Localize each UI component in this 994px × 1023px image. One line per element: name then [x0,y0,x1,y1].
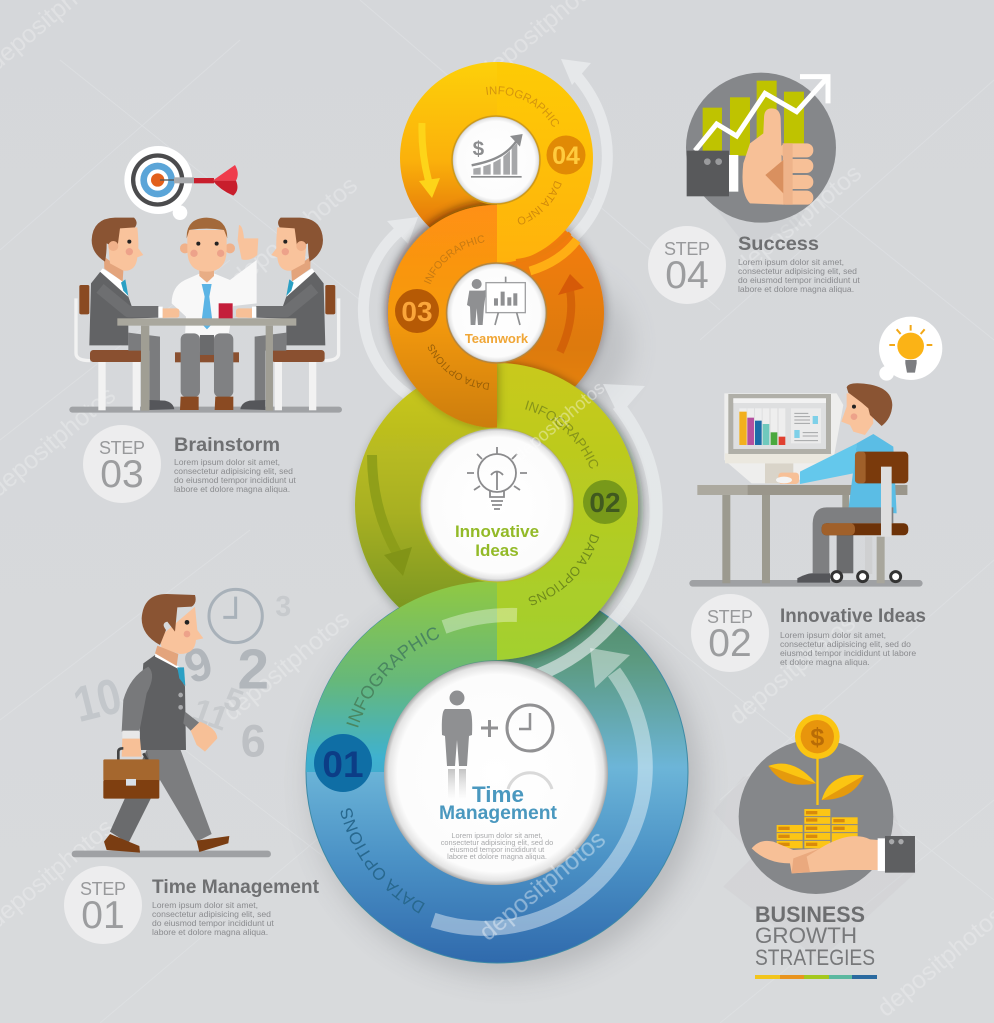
disc: step 02 ring [355,364,638,646]
ribbon: step 02 right half [497,363,638,660]
ring labels: INFOGRAPHIC [486,86,559,127]
icon: hand growing money plant [713,714,917,960]
watermark over rings: depositphotos [474,825,611,947]
ground shadow [312,588,700,976]
white circle: step 04 [452,116,540,204]
walking man [104,594,229,853]
monitor chart [739,408,821,445]
ribbon: step 04 right half [497,62,593,263]
heading: innovative ideas: Innovative Ideas [780,606,926,627]
icon: clock and floating numbers: 11 [187,692,233,739]
scene: brainstorm meeting [69,146,342,413]
heading: time management: Time [472,782,524,807]
text: innovative ideas body: consectetur adipisicing elit, sed do [780,639,911,649]
ring labels [340,86,600,914]
step badge 02: 02 [708,622,752,665]
disc: step 03 ring [388,205,604,421]
text: circle lorem: eiusmod tempor incididunt ut [450,845,544,854]
scene: thumbs up chart [686,73,836,247]
step badge 01: 01 [81,894,125,937]
coin [795,714,840,759]
ring labels: INFOGRAPHIC [424,235,484,284]
scene: man at computer [689,317,942,587]
text: brainstorm body: consectetur adipisicing elit, sed [174,466,293,476]
white circle: step 01 [384,661,608,885]
heading: success: Success [738,234,819,255]
ring labels: INFOGRAPHIC [346,628,439,728]
step badge 02 [691,594,769,672]
text: time management body: labore et dolore magna aliqua. [152,927,268,937]
open hand [752,836,878,873]
text: circle lorem: labore et dolore magna aliqua. [447,852,547,861]
ribbon: step 01 upper-left [306,581,497,772]
heading: innovative ideas: Ideas [475,541,519,560]
central spiral graphic [302,59,710,986]
text: circle lorem: consectetur adipisicing elit, sed do [441,838,553,847]
white circle: step 02 [420,428,574,582]
heading: time management: Management [439,802,557,824]
heading: time management [439,782,557,824]
icon: clock and floating numbers: 6 [241,716,266,767]
text: success body [738,257,860,294]
step badge 04 [648,226,726,304]
icon: dollar growth chart: $ [473,138,485,161]
step badge 04: 04 [665,254,709,297]
disc: step 04 ring [400,62,592,254]
ring labels: DATA OPTIONS [340,808,425,914]
icon: target thought bubble [124,146,238,220]
text: time management body: do eiusmod tempor incididunt ut [152,918,274,928]
arrow: inside step 01 [433,648,645,928]
ribbon: step 03 left half [388,205,497,428]
badge 03 [395,289,439,333]
upper ring shadow [490,275,630,415]
text: brainstorm body: do eiusmod tempor incididunt ut [174,475,296,485]
icon: clock and floating numbers: 9 [178,636,219,694]
text: success body: labore et dolore magna aliqua. [738,284,854,294]
panel: step 04 success [648,73,860,304]
text: success body: Lorem ipsum dolor sit amet, [738,257,844,267]
ribbon tail stripes [516,233,577,271]
band highlight on ribbon [444,615,517,627]
panel: step 03 brainstorm [69,146,342,503]
badge 04 [546,136,586,174]
text: brainstorm body: Lorem ipsum dolor sit amet, [174,457,280,467]
step badge 04: STEP [664,239,710,259]
watermark over rings [474,378,611,947]
scene: walking man with clock [68,589,291,857]
center person [172,218,258,410]
title: business growth strategies: BUSINESS [755,902,865,927]
watermark over rings: depositphotos [510,378,608,465]
arrow: yellow inside step 04 [419,123,440,198]
heading: innovative ideas [455,522,539,560]
title: business growth strategies [755,902,875,970]
badge 01 [314,734,372,792]
leaves [768,764,864,800]
badge 02 [583,480,627,524]
watermarks: depositphotos [226,171,363,293]
step badge 03: STEP [99,438,145,458]
heading: innovative ideas: Innovative [455,522,539,541]
disc: step 01 ring [306,581,688,963]
ring labels: INFOGRAPHIC [525,400,598,468]
text: innovative ideas body: eiusmod tempor incididunt ut labore [780,648,916,658]
title: business growth strategies: GROWTH [755,923,857,948]
step badge 01: STEP [80,879,126,899]
badge 02: 02 [589,487,621,518]
arrow: inside step 02 [372,455,412,576]
icon: light bulb [467,447,527,509]
icon: clock and floating numbers: 3 [275,591,291,623]
icon: clock and floating numbers: 5 [219,680,248,720]
text: time management body: Lorem ipsum dolor sit amet, [152,900,258,910]
coin stacks [777,809,858,848]
step badge 02: STEP [707,607,753,627]
text: brainstorm body: labore et dolore magna aliqua. [174,484,290,494]
text: time management body: consectetur adipisicing elit, sed [152,909,271,919]
step badge 03: 03 [100,453,144,496]
icon: person plus clock [442,690,553,799]
watermarks: depositphotos [218,605,355,727]
ring labels: DATA OPTIONS [528,534,600,606]
arrow: step 03 outer [363,217,425,405]
heading: time management: Time Management [152,877,320,898]
text: circle lorem [441,831,553,861]
watermarks: depositphotos [724,609,861,731]
text: success body: do eiusmod tempor incididunt ut [738,275,860,285]
text: innovative ideas body: Lorem ipsum dolor sit amet, [780,630,886,640]
icon: dollar growth chart [471,134,523,178]
badge 01: 01 [322,744,364,785]
icon: briefcase [103,748,159,799]
icon: clock and floating numbers: 10 [68,667,127,733]
badge 03: 03 [401,296,433,327]
colour bar [755,975,877,979]
icon: presenter with board [467,277,525,325]
text: innovative ideas body: et dolore magna aliqua. [780,657,870,667]
arrow: step 02 outer [530,384,656,678]
title: business growth strategies: STRATEGIES [755,945,875,970]
step badge 01 [64,866,142,944]
panel: step 01 time management [64,589,320,944]
icon: clock and floating numbers [68,589,291,767]
white circle: step 03 [446,263,546,363]
text: circle lorem: Lorem ipsum dolor sit amet, [451,831,543,840]
arrow: inside step 03 [558,274,584,352]
panel: step 02 innovative ideas [689,317,942,672]
text: success body: consectetur adipisicing elit, sed [738,266,857,276]
arrow: step 04 outer [561,59,607,240]
seated man [776,383,897,583]
heading: teamwork: Teamwork [465,331,529,346]
office chair [822,452,908,583]
heading: brainstorm: Brainstorm [174,435,280,456]
text: time management body [152,900,274,937]
step badge 03 [83,425,161,503]
panel: business growth [713,714,917,979]
icon: clock and floating numbers: 2 [238,638,269,701]
ring labels: DATA INFO [518,181,562,224]
coin: $ [810,724,824,752]
ring labels: DATA OPTIONS [428,344,490,390]
watermarks: depositphotos [730,159,867,281]
text: innovative ideas body [780,630,916,667]
icon: bulb thought bubble [879,317,942,381]
badge 04: 04 [552,142,580,170]
text: brainstorm body [174,457,296,494]
thumb hand [742,108,813,205]
